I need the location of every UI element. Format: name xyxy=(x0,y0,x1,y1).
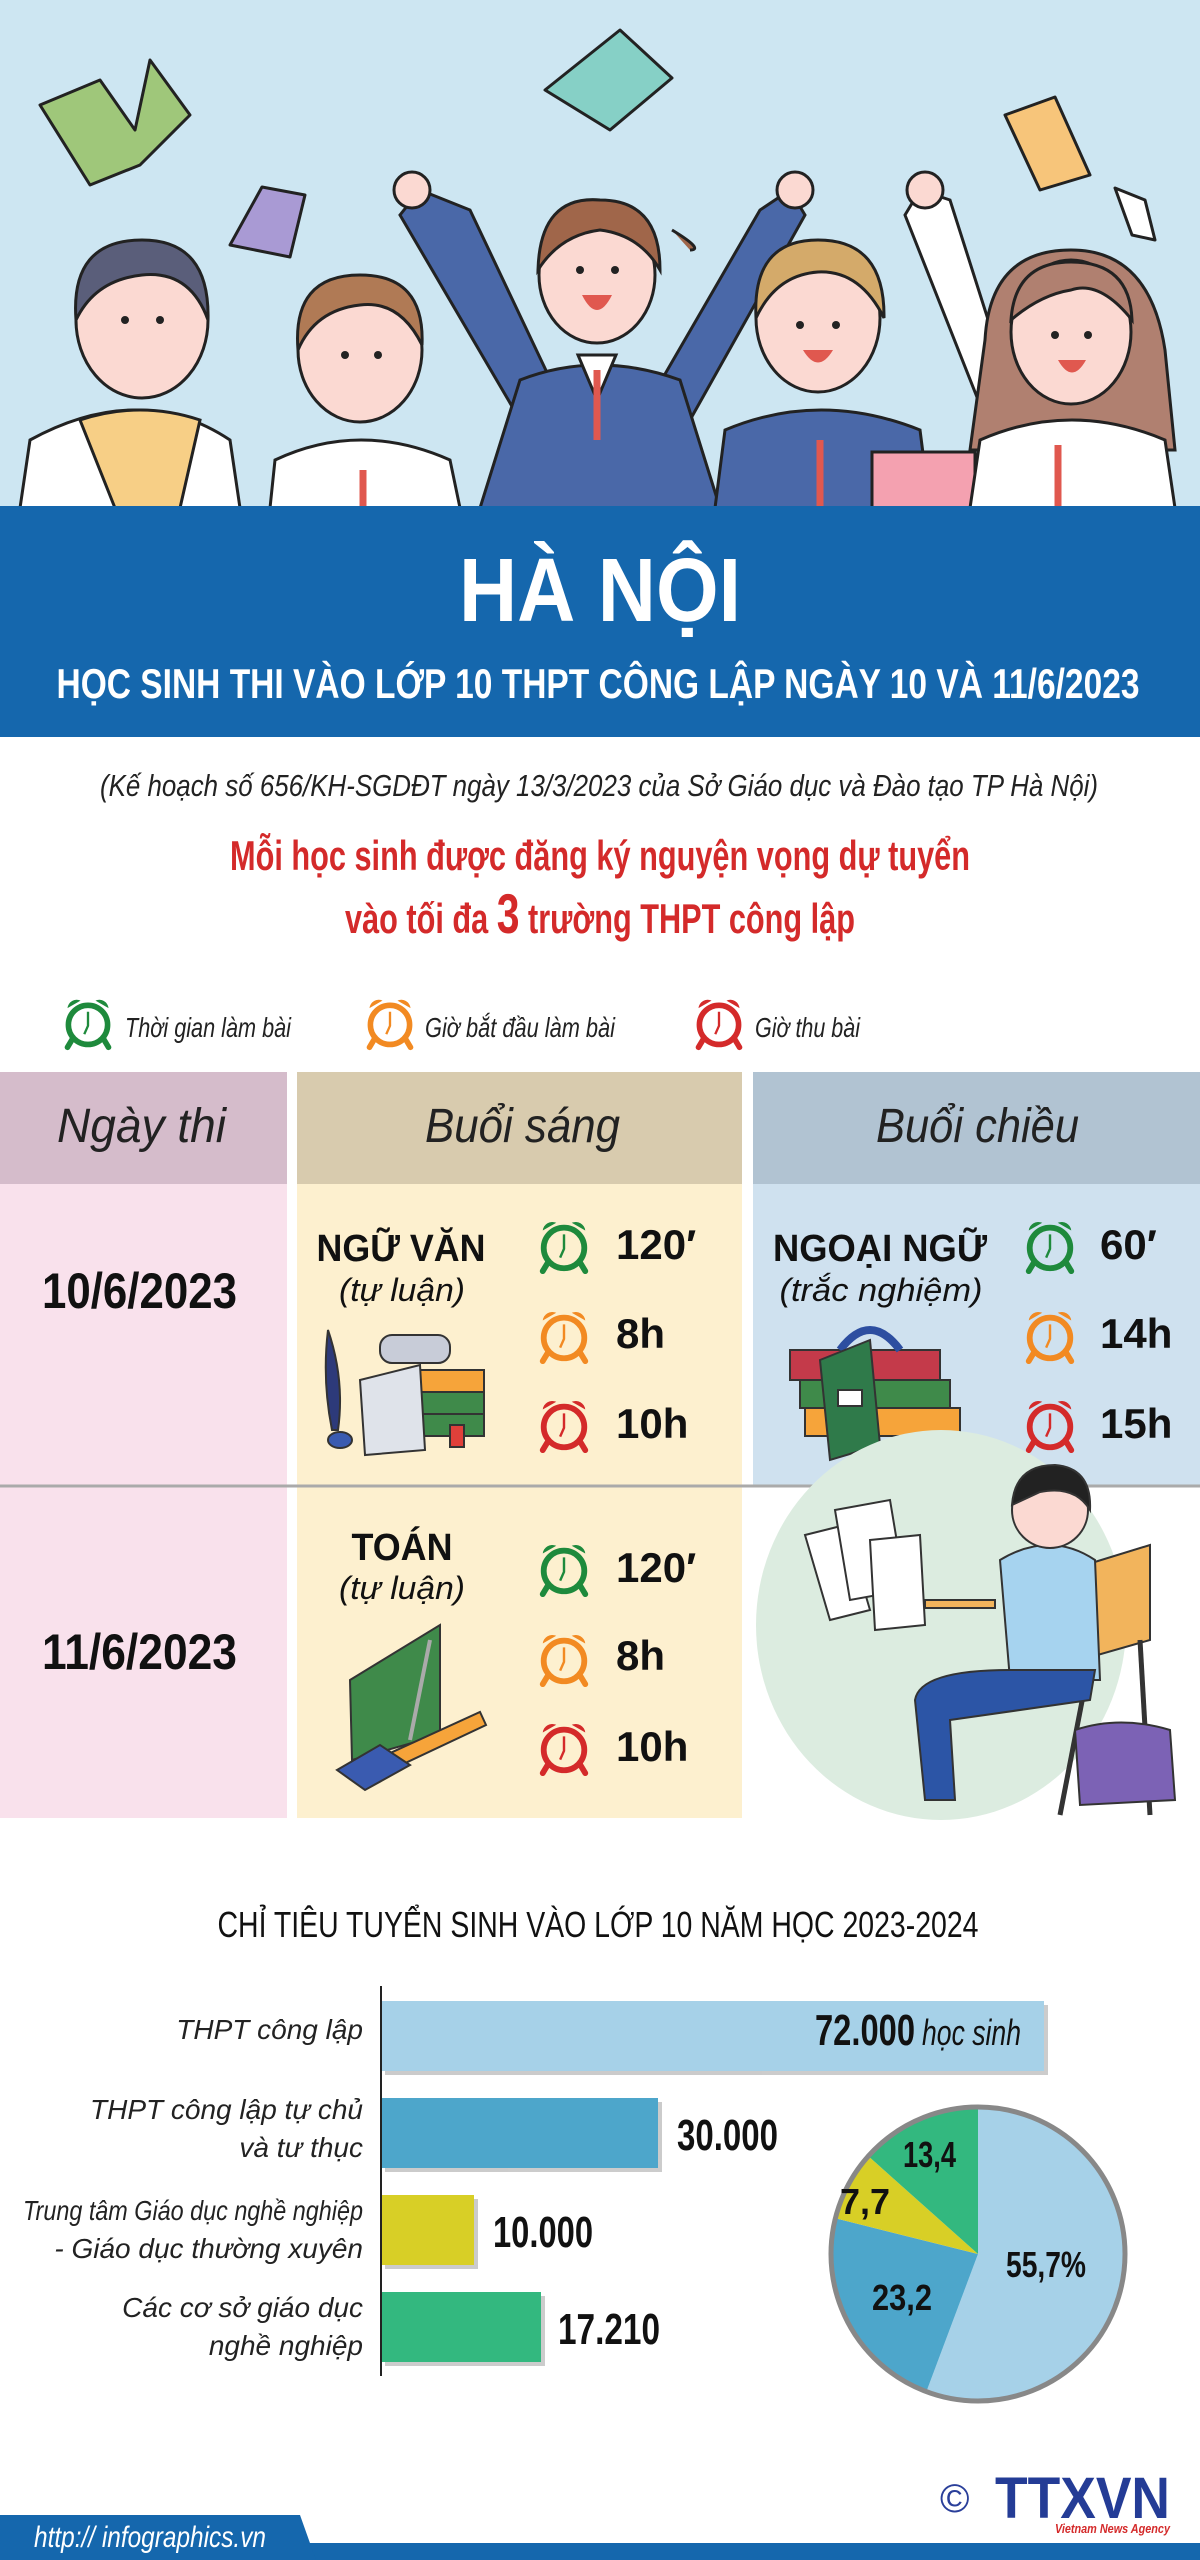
times: 15h xyxy=(1100,1400,1172,1447)
icon: orange clock xyxy=(369,1000,411,1047)
pie chart: 13,4 xyxy=(903,2134,956,2175)
subjects: TOÁN xyxy=(352,1525,452,1569)
bar labels: và tư thục xyxy=(239,2132,363,2163)
dates xyxy=(42,1263,237,1680)
bar values: 10.000 xyxy=(493,2208,593,2257)
student5 xyxy=(970,250,1175,450)
icon: math tools xyxy=(337,1625,486,1790)
pie chart: 55,7% xyxy=(1006,2244,1086,2285)
bar values: 72.000 xyxy=(815,2006,915,2055)
legend: Thời gian làm bài xyxy=(125,1012,292,1043)
center girl arms xyxy=(400,190,560,420)
times: 120′ xyxy=(616,1544,696,1591)
logo: TTXVN: TTXVN xyxy=(995,2466,1170,2531)
bar labels: nghề nghiệp xyxy=(209,2330,363,2361)
logo: TTXVN xyxy=(940,2466,1171,2536)
header illustration xyxy=(0,0,1200,512)
icon: literature books xyxy=(326,1330,484,1455)
subjects xyxy=(316,1226,987,1606)
student2 xyxy=(270,440,460,508)
icon: green clock xyxy=(67,1000,109,1047)
legend: Giờ bắt đầu làm bài xyxy=(425,1012,616,1043)
footer xyxy=(0,2515,1200,2560)
legend xyxy=(67,1000,861,1047)
subjects: NGOẠI NGỮ xyxy=(773,1226,987,1270)
times: 8h xyxy=(616,1632,665,1679)
pie chart xyxy=(831,2107,1125,2401)
chart title: CHỈ TIÊU TUYỂN SINH VÀO LỚP 10 NĂM HỌC 2023-2024 xyxy=(218,1903,978,1945)
subjects: (trắc nghiệm) xyxy=(780,1272,982,1308)
times: 60′ xyxy=(1100,1221,1157,1268)
logo: TTXVN: © xyxy=(940,2477,969,2521)
flying papers xyxy=(40,30,1155,257)
illustration: student writing exam xyxy=(756,1430,1175,1820)
logo: TTXVN: Vietnam News Agency xyxy=(1055,2521,1171,2536)
dates: 10/6/2023 xyxy=(42,1263,237,1319)
students xyxy=(20,172,1175,512)
table headers: Ngày thi xyxy=(57,1100,227,1153)
times: 14h xyxy=(1100,1310,1172,1357)
student1 xyxy=(20,410,240,508)
red highlight text: vào tối đa 3 trường THPT công lập xyxy=(345,882,855,945)
title banner xyxy=(0,506,1200,737)
bar values: 17.210 xyxy=(558,2305,660,2354)
times: 10h xyxy=(616,1400,688,1447)
times: 120′ xyxy=(616,1221,696,1268)
footer: http:// infographics.vn xyxy=(34,2521,266,2554)
student4 xyxy=(715,410,930,508)
pie chart: 7,7 xyxy=(840,2181,890,2222)
bar values: 30.000 xyxy=(677,2111,778,2160)
subjects: (tự luận) xyxy=(339,1272,465,1308)
bar labels: Trung tâm Giáo dục nghề nghiệp xyxy=(23,2195,363,2226)
schedule table xyxy=(0,1072,1200,1820)
times: 10h xyxy=(616,1723,688,1770)
bar labels xyxy=(23,2014,363,2361)
legend: Giờ thu bài xyxy=(755,1012,861,1043)
bar labels: THPT công lập tự chủ xyxy=(90,2094,363,2125)
title: HÀ NỘI: HÀ NỘI xyxy=(459,539,741,641)
bar chart xyxy=(23,1986,1048,2376)
icon: red clock xyxy=(698,1000,740,1047)
subjects: (tự luận) xyxy=(339,1570,465,1606)
red highlight text xyxy=(230,831,970,945)
dates: 11/6/2023 xyxy=(42,1624,237,1680)
bar labels: - Giáo dục thường xuyên xyxy=(54,2233,363,2264)
bar labels: Các cơ sở giáo dục xyxy=(122,2292,363,2323)
faces xyxy=(121,266,1092,372)
times: 8h xyxy=(616,1310,665,1357)
pie chart: 23,2 xyxy=(872,2277,932,2318)
table headers xyxy=(57,1100,1079,1153)
clocks xyxy=(543,1222,585,1271)
icon: foreign language books xyxy=(790,1330,960,1460)
right arm student5 xyxy=(905,190,1020,430)
subjects: NGỮ VĂN xyxy=(316,1226,486,1270)
table headers: Buổi chiều xyxy=(876,1100,1079,1153)
bar values: học sinh xyxy=(922,2012,1021,2053)
times xyxy=(616,1221,1172,1770)
bar values xyxy=(493,2006,1021,2354)
bar labels: THPT công lập xyxy=(176,2014,363,2045)
table headers: Buổi sáng xyxy=(425,1100,620,1153)
